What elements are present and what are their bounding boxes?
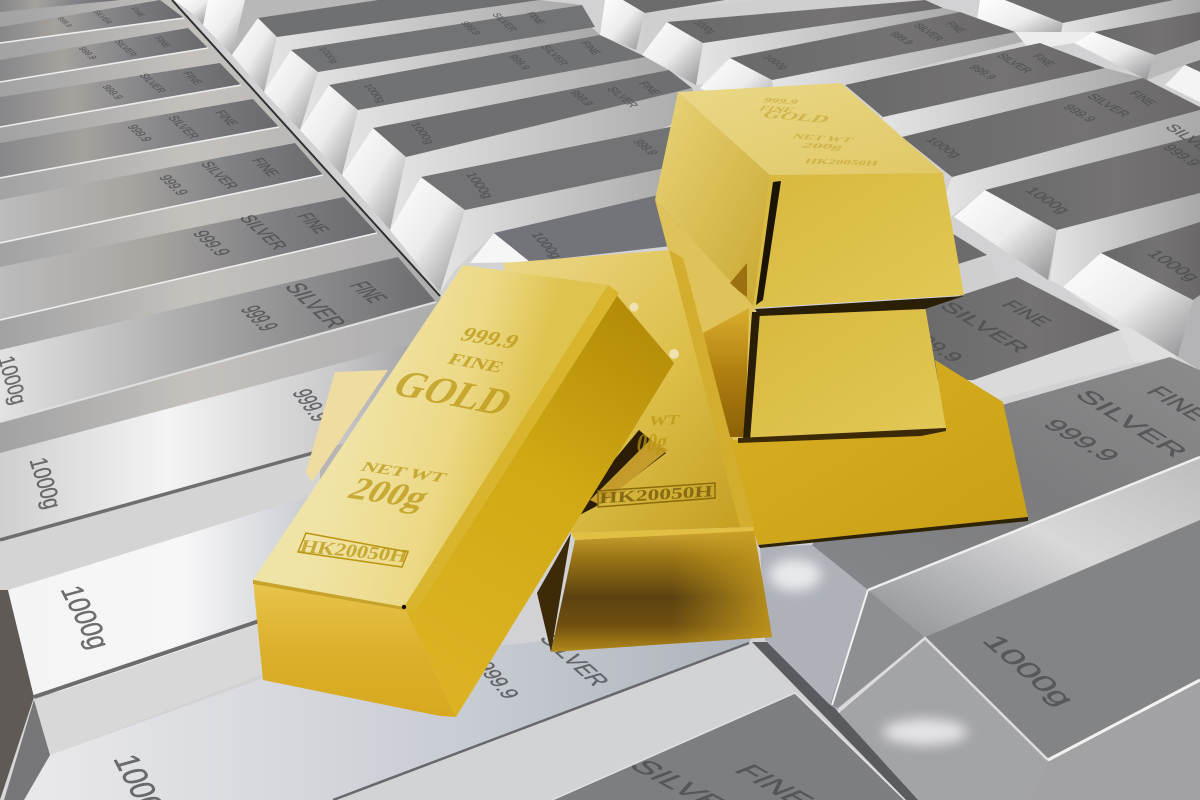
gold bar: top of right stack: NET WT [790,132,856,144]
silver bars: middle rows [172,0,700,296]
gold bar: middle leaning bar: WT [648,412,681,429]
silver bar stamps: 999.9 [99,84,125,101]
silver bar stamps: SILVER [112,39,140,57]
silver bar stamps: FINE [343,279,393,305]
silver bar stamps: 999.9 [965,64,999,81]
silver bar stamps: 999.9 [155,174,192,197]
silver bar stamps: 1000g [361,83,387,104]
silver bar stamps: FINE [1125,89,1160,107]
silver bar stamps: 999.9 [505,54,533,71]
gold bar: middle of right stack [655,200,946,443]
silver bar stamps: 999.9 [234,303,284,333]
silver bars: lower right rows [760,277,1200,800]
gold bar: main front bar with stamp: NET WT [357,459,451,486]
gold bar: bottom of right stack [725,360,1028,548]
silver bar stamps: FINE [996,298,1056,329]
silver bar stamps: FINE [1029,53,1057,68]
silver bar stamps: 1000g [922,135,965,159]
silver bar stamps: FINE [211,109,240,127]
silver bar stamps: SILVER [603,86,641,109]
silver bar stamps: SILVER [537,44,570,66]
silver bar stamps: 999.9 [470,659,524,701]
silver bar stamps: 999.9 [887,30,915,46]
silver bar stamps: SILVER [197,160,242,190]
silver bar stamps: 1000g [1021,185,1073,216]
silver bar stamps: 999.9 [124,124,154,143]
gold bar: top of right stack: GOLD [759,108,833,125]
silver bar stamps: SILVER [935,299,1035,355]
silver bar stamps: FINE [577,40,603,56]
silver bar stamps: FINE [292,211,335,235]
gold bar: top of right stack: FINE [757,104,797,114]
silver bar stamps: 999.9 [900,326,968,365]
silver bar stamps: 1000g [317,46,341,64]
silver bars: left rows [0,0,480,600]
silver bar stamps: 999.9 [286,387,335,424]
silver bar stamps: FINE [524,11,548,25]
gold bar: main front bar with stamp: 200g [341,470,437,515]
silver bar stamps: SILVER [1068,386,1194,460]
silver bar stamps: SILVER [993,52,1035,75]
silver bar stamps: 999.9 [76,46,100,60]
gold bar: top of right stack: 999.9 [760,96,801,106]
silver bar stamps: 1000g [691,20,719,35]
silver bar stamps: SILVER [136,73,168,94]
silver bar stamps: SILVER [164,115,201,140]
silver bar stamps: FINE [179,71,205,86]
silver bar stamps: FINE [943,20,968,34]
silver bar stamps: SILVER [490,12,520,32]
silver bar stamps: 999.9 [1060,103,1099,124]
silver bar stamps: SILVER [278,280,353,330]
silver bars: lower left rows [0,490,925,800]
silver bar stamps: FINE [635,81,662,96]
silver bar stamps: SILVER [1084,92,1133,118]
gold bar: top of right stack: 200g [799,142,846,151]
gold bar: top of right stack [655,83,964,316]
silver bar stamps: 999.9 [1037,416,1127,465]
gold bar: main front bar with stamp: 999.9 [455,324,524,354]
gold bar: middle leaning bar: 00g [634,428,670,457]
gold bar: middle leaning bar [503,250,772,652]
silver bar stamps: 1000g [528,231,566,260]
gold bar: main front bar with stamp: FINE [444,351,507,376]
silver bar stamps: 999.9 [458,20,483,36]
silver bar stamps: 1000g [24,455,67,512]
silver bars: right rows [600,0,1200,370]
silver bar stamps: 1000g [976,631,1081,710]
gold bar: main front bar with stamp: HK20050H [297,537,410,567]
silver bar stamps: 1000g [760,54,790,71]
silver bar stamps: 1000g [54,582,117,652]
gold bar: back left bar [306,370,388,482]
gold bar: middle leaning bar: HK20050H [599,483,714,507]
silver bar stamps: 999.9 [188,228,236,258]
silver bar stamps: FINE [152,35,175,49]
silver bar stamps: SILVER [234,213,293,252]
silver bar stamps: 999.9 [55,17,73,28]
silver bar stamps: SILVER [91,10,113,25]
silver bar stamps: SILVER [533,632,616,688]
silver bar stamps: SILVER [910,22,946,43]
silver bar stamps: 1000g [462,171,497,200]
silver bar stamps: 1000g [408,121,437,145]
silver bar stamps: 999.9 [629,139,660,156]
gold bar: main front bar with stamp [253,265,679,717]
silver bar stamps: FINE [248,156,283,178]
gold bar: top of right stack: HK20050H [803,157,881,167]
silver bar stamps: FINE [128,7,146,18]
silver bar stamps: 999.9 [566,90,596,107]
gold bar: main front bar with stamp: GOLD [384,362,522,423]
